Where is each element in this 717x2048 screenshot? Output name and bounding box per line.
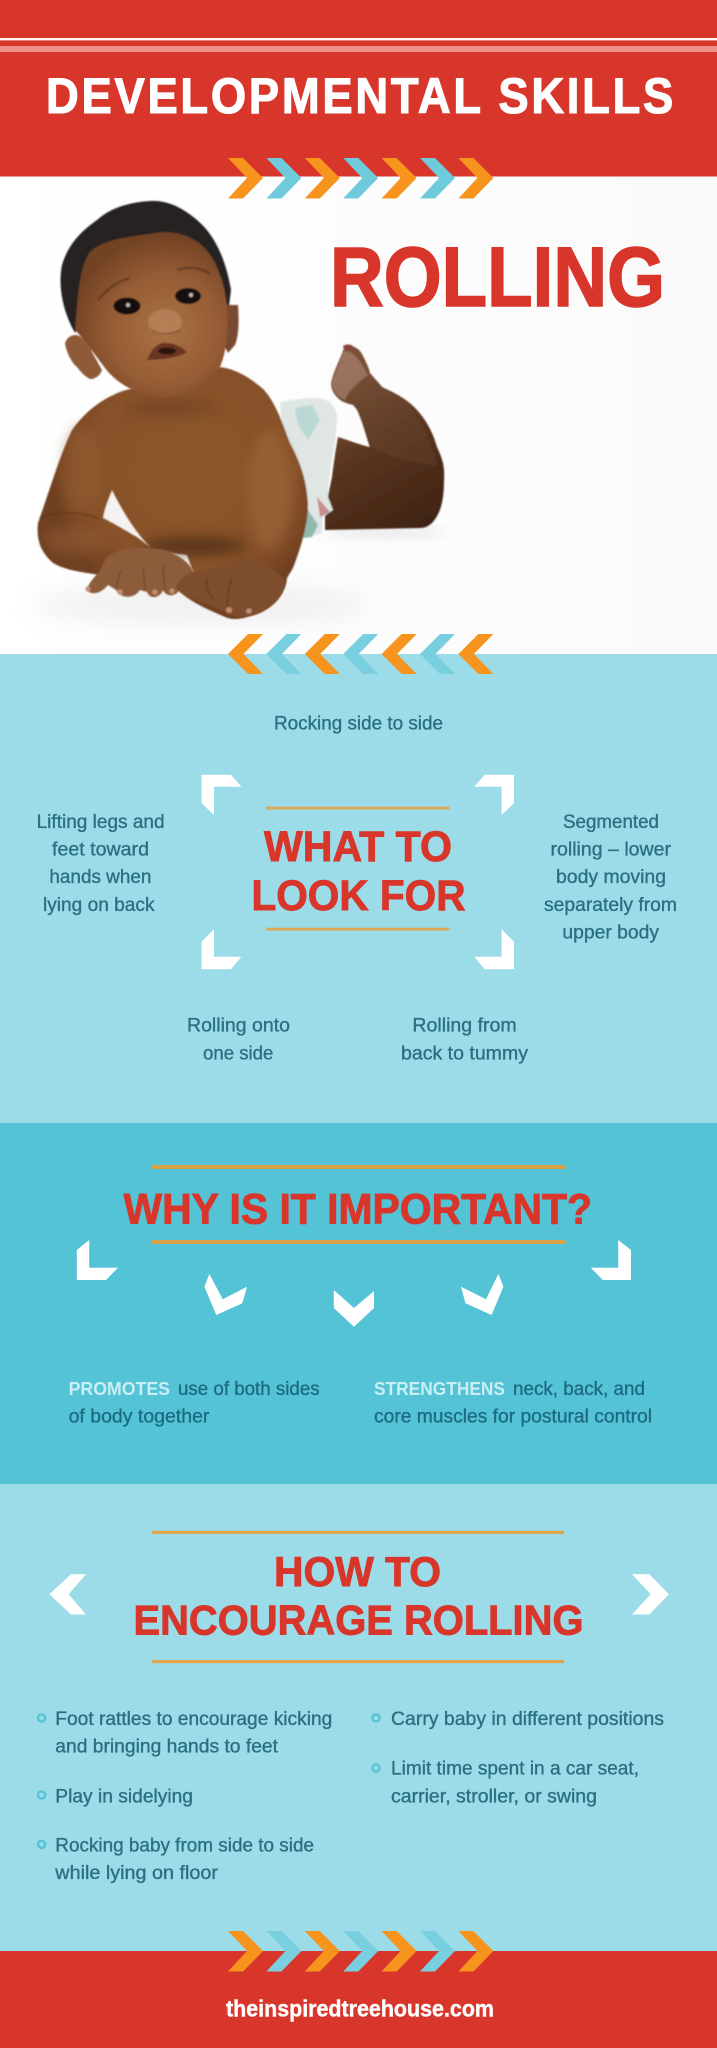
text: strengthens: neck, back, and (513, 1378, 645, 1400)
left ear (65, 335, 102, 379)
heading: why is it important: WHY IS IT IMPORTANT? (124, 1185, 592, 1233)
item: lifting legs: feet toward (52, 839, 149, 861)
diaper (280, 398, 337, 540)
text: promotes (69, 1378, 320, 1428)
heading: what to look for: LOOK FOR (252, 872, 466, 920)
heading: what to look for: WHAT TO (264, 823, 452, 871)
item: segmented rolling (544, 811, 677, 943)
text: promotes: of body together (69, 1406, 210, 1428)
list: left column: Rocking baby from side to side (55, 1835, 314, 1857)
item: segmented rolling: separately from (544, 894, 677, 916)
chevrons: top row (228, 158, 493, 198)
arm crease (40, 513, 102, 520)
item: rolling onto one side: one side (203, 1042, 273, 1064)
face (75, 232, 228, 397)
mouth (147, 343, 187, 360)
title: ROLLING: ROLLING (330, 230, 665, 324)
item: rolling onto one side: Rolling onto (187, 1015, 290, 1037)
item: rolling from back to tummy: Rolling from (412, 1015, 517, 1037)
nose (148, 309, 182, 335)
right hand (177, 558, 285, 616)
brows (98, 278, 130, 300)
heading: how to encourage rolling: ENCOURAGE ROLLING (134, 1596, 584, 1644)
left hand (87, 548, 193, 597)
gap between arm and torso (103, 490, 150, 547)
arrows pointing to text (77, 1240, 631, 1327)
text: strengthens: STRENGTHENS (374, 1379, 505, 1399)
heading: how to encourage rolling (134, 1548, 584, 1644)
list: right column (372, 1708, 664, 1808)
item: rolling from back to tummy (401, 1015, 528, 1064)
lower leg shade (358, 387, 437, 466)
text: strengthens: core muscles for postural control (374, 1406, 652, 1428)
text: strengthens (374, 1378, 652, 1428)
list: left column: and bringing hands to feet (55, 1736, 279, 1758)
chevrons: under photo (228, 634, 493, 674)
item: rolling from back to tummy: back to tummy (401, 1042, 528, 1064)
list: left column (38, 1708, 332, 1884)
list: left column: Foot rattles to encourage kicking (55, 1708, 332, 1730)
heading: how to encourage rolling: HOW TO (274, 1548, 441, 1595)
corner brackets (202, 775, 514, 969)
item: segmented rolling: rolling – lower (550, 839, 671, 861)
item: rocking: Rocking side to side (274, 712, 443, 734)
panel: how to encourage rolling (0, 1484, 717, 1951)
list: right column: Limit time spent in a car seat, (391, 1758, 639, 1780)
body shading (143, 537, 247, 555)
arrow: left (49, 1574, 86, 1614)
item: segmented rolling: upper body (562, 921, 659, 943)
leg and foot (325, 345, 444, 530)
list: right column: Carry baby in different positions (391, 1708, 664, 1730)
item: segmented rolling: Segmented (563, 811, 659, 833)
item: segmented rolling: body moving (556, 866, 666, 888)
list: left column: while lying on floor (54, 1862, 219, 1884)
panel: header banner (0, 0, 717, 176)
text: promotes: use of both sides (178, 1378, 320, 1400)
item: lifting legs: hands when (49, 866, 151, 888)
photo: baby lying on tummy (30, 201, 445, 625)
arrow: right (632, 1574, 669, 1614)
item: lifting legs: lying on back (43, 894, 155, 916)
right ear (224, 305, 239, 353)
item: lifting legs (37, 811, 165, 916)
chevrons: footer row (228, 1931, 493, 1972)
list: right column: carrier, stroller, or swing (391, 1786, 597, 1808)
item: lifting legs: Lifting legs and (37, 811, 165, 833)
torso and arms (38, 367, 308, 619)
panel: footer (0, 1951, 717, 2048)
panel: what to look for (0, 654, 717, 1123)
heading: what to look for (252, 823, 466, 920)
text: promotes: PROMOTES (69, 1379, 170, 1399)
hair (61, 201, 231, 333)
panel: photo background (0, 176, 717, 656)
list: left column: Play in sidelying (55, 1786, 193, 1808)
panel: why is it important (0, 1123, 717, 1484)
eyes (114, 298, 140, 314)
footer url: theinspiredtreehouse.com (226, 1996, 494, 2022)
foot highlight (332, 351, 368, 400)
item: rolling onto one side (187, 1015, 290, 1064)
fingertips (85, 586, 252, 614)
